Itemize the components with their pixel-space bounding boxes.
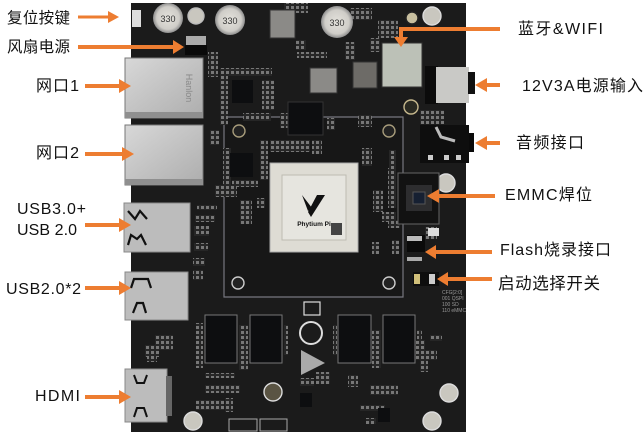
connector: Flash programming header: [407, 228, 439, 261]
connector: reset button: [132, 10, 141, 27]
hole: mounting holes: [184, 7, 458, 430]
label: HDMI: HDMI: [35, 388, 80, 405]
label: net 1: 网口1: [36, 78, 79, 95]
WiFi module: [382, 43, 422, 87]
arrow: net 1: [85, 79, 131, 93]
arrow: HDMI: [85, 390, 131, 404]
warning marks: [300, 302, 325, 375]
label: bluetooth wifi: 蓝牙&WIFI: [518, 20, 603, 38]
logo mark: [302, 195, 325, 217]
component pad clusters: [145, 3, 444, 424]
boot table silkscreen: [442, 290, 466, 314]
audio jack: [420, 125, 474, 163]
label: audio: 音频接口: [516, 134, 584, 152]
label: boot switch: 启动选择开关: [498, 274, 600, 293]
arrow: DC input: [475, 78, 500, 92]
label: net 2: 网口2: [36, 145, 79, 162]
HDMI port: [125, 369, 172, 422]
chip name: Phytium Pi: [297, 221, 331, 228]
USB 2.0 double port: [125, 272, 188, 320]
label: USB3: USB 2.0: [17, 222, 77, 239]
capacitors: 330: [160, 14, 176, 24]
USB 3.0 + 2.0 port: [124, 203, 190, 252]
ethernet port 1: [125, 58, 203, 118]
pin headers: [229, 419, 287, 431]
capacitors: 330: [222, 16, 238, 26]
ethernet port 2: [125, 125, 203, 185]
capacitors: 330: [329, 18, 345, 28]
arrow: Flash: [425, 245, 492, 259]
boot table silkscreen: 110 eMMC: [442, 308, 466, 314]
CPU area outline: [224, 117, 403, 297]
label: USB3: [17, 201, 86, 239]
circuit board: [131, 3, 466, 432]
arrow: net 2: [85, 147, 134, 161]
chips: [205, 80, 415, 422]
arrow: USB2: [85, 281, 131, 295]
connector: fan power header: [185, 36, 207, 55]
EMMC footprint: [398, 173, 439, 224]
label: Flash: Flash烧录接口: [500, 241, 611, 259]
boot table silkscreen: CFG[2:0]: [442, 290, 463, 296]
arrow: bluetooth wifi: [394, 27, 500, 47]
arrow: USB3: [85, 218, 131, 232]
label: reset: 复位按键: [7, 9, 70, 27]
arrow: EMMC: [427, 189, 495, 203]
label: USB2: USB2.0*2: [6, 281, 81, 298]
connector: boot selection switch: [413, 272, 439, 286]
QR mark: [331, 223, 342, 235]
DC power jack: [425, 66, 475, 104]
capacitors: [153, 3, 353, 38]
arrow: boot switch: [437, 272, 492, 286]
label: fan: 风扇电源: [7, 38, 70, 56]
arrow: fan: [78, 40, 184, 54]
ethernet port 1: Hanlon: [184, 74, 194, 102]
boot table silkscreen: 001 QSPI: [442, 296, 464, 302]
arrow: reset: [78, 11, 119, 23]
CPU package: [270, 163, 358, 252]
label: USB3: USB3.0+: [17, 201, 86, 218]
arrow: audio: [475, 136, 500, 150]
boot table silkscreen: 100 SD: [442, 302, 459, 308]
label: EMMC: EMMC焊位: [505, 186, 592, 204]
label: DC input: 12V3A电源输入: [522, 77, 643, 95]
inductors: [270, 10, 377, 93]
